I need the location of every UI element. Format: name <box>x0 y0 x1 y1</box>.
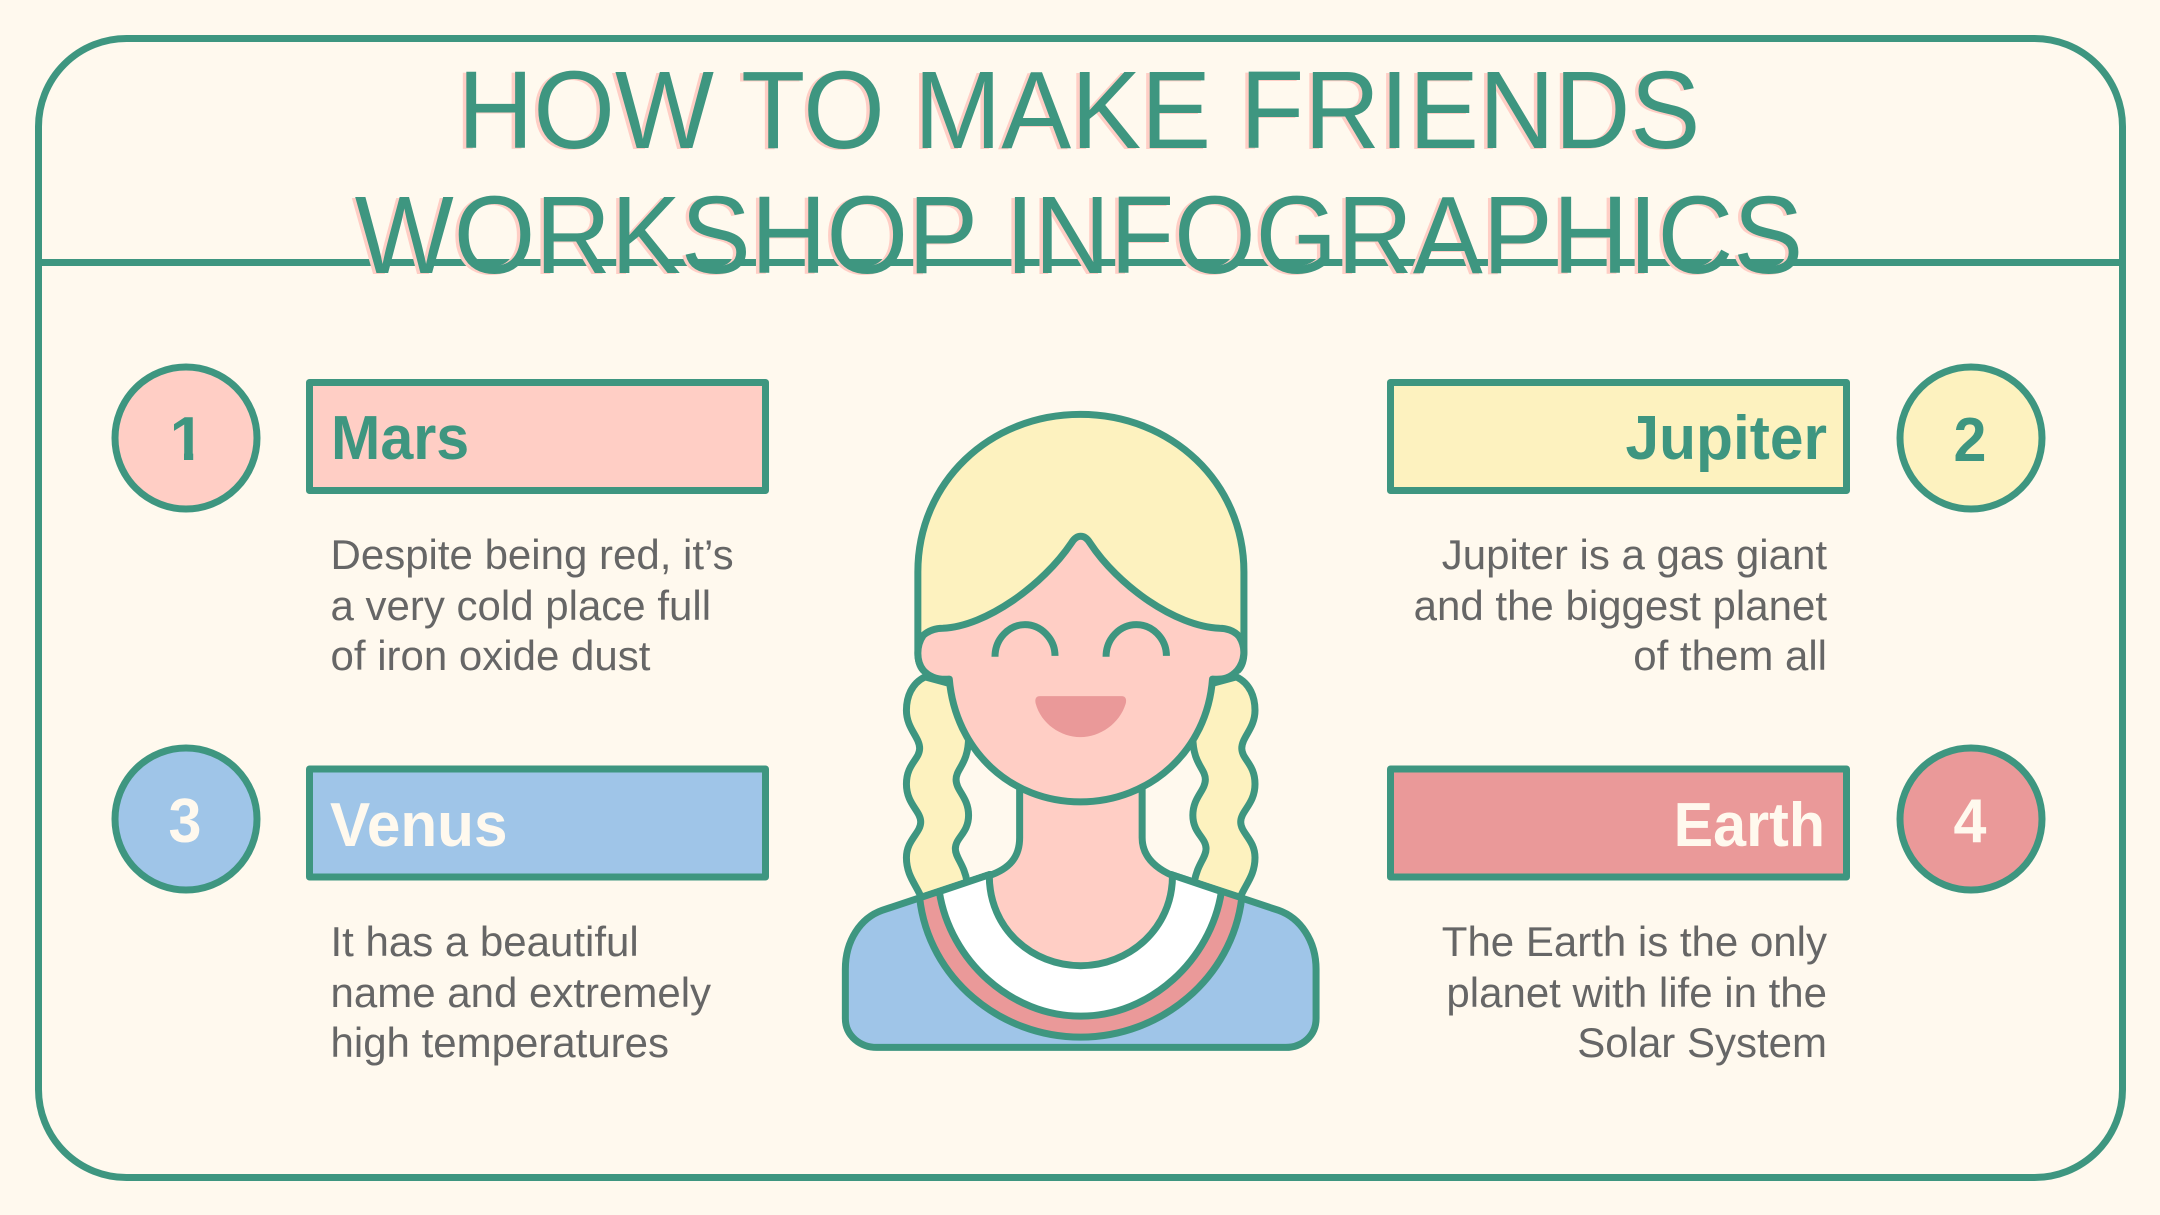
neck <box>989 782 1172 966</box>
panel: Earth <box>1390 748 2042 1066</box>
number badge 1: 1 <box>170 405 204 474</box>
text: Venus description <box>330 918 711 1066</box>
number badge 4: 4 <box>1954 786 1987 855</box>
hair <box>918 414 1244 670</box>
text: Mars description <box>330 531 734 679</box>
text: Mars description: Despite being red, it’s <box>330 531 734 578</box>
number badge 2 <box>1900 367 2042 509</box>
title <box>352 49 1803 297</box>
text: Earth description <box>1442 918 1827 1066</box>
heading: Earth: Earth <box>1674 790 1825 859</box>
left eye <box>995 625 1055 657</box>
text: Mars description: of iron oxide dust <box>330 632 651 679</box>
text: Earth description: The Earth is the only <box>1442 918 1827 965</box>
text: Venus description: name and extremely <box>330 969 711 1016</box>
heading: Jupiter: Jupiter <box>1625 403 1827 472</box>
panel: Jupiter <box>1390 367 2042 679</box>
white collar <box>939 875 1221 1016</box>
text: Venus description: It has a beautiful <box>330 918 639 965</box>
heading: Mars <box>310 382 766 490</box>
text: Jupiter description: Jupiter is a gas giant <box>1442 531 1827 578</box>
illustration: smiling girl with braids <box>845 414 1316 1047</box>
panel: Mars <box>115 367 766 679</box>
heading: Jupiter <box>1390 382 1846 490</box>
heading: Earth <box>1390 769 1846 877</box>
text: Venus description: high temperatures <box>330 1019 669 1066</box>
right braid <box>1193 677 1255 898</box>
text: Jupiter description <box>1414 531 1827 679</box>
number badge 3 <box>115 748 257 890</box>
number badge 2: 2 <box>1954 405 1986 474</box>
text: Jupiter description: and the biggest planet <box>1414 582 1827 629</box>
face <box>918 536 1244 802</box>
panel: Venus <box>115 748 766 1066</box>
heading: Venus <box>310 769 766 877</box>
left braid <box>906 677 969 898</box>
text: Mars description: a very cold place full <box>330 582 711 629</box>
mouth <box>1035 696 1126 737</box>
title: HOW TO MAKE FRIENDS <box>458 49 1700 172</box>
text: Jupiter description: of them all <box>1633 632 1827 679</box>
number badge 4 <box>1900 748 2042 890</box>
shirt <box>845 875 1316 1047</box>
title: WORKSHOP INFOGRAPHICS <box>355 174 1803 297</box>
right eye <box>1106 625 1166 657</box>
heading: Venus: Venus <box>330 790 507 859</box>
number badge 3: 3 <box>169 786 201 855</box>
text: Earth description: planet with life in the <box>1446 969 1827 1016</box>
collar trim <box>920 875 1242 1037</box>
number badge 1 <box>115 367 257 509</box>
text: Earth description: Solar System <box>1577 1019 1827 1066</box>
heading: Mars: Mars <box>331 403 469 472</box>
